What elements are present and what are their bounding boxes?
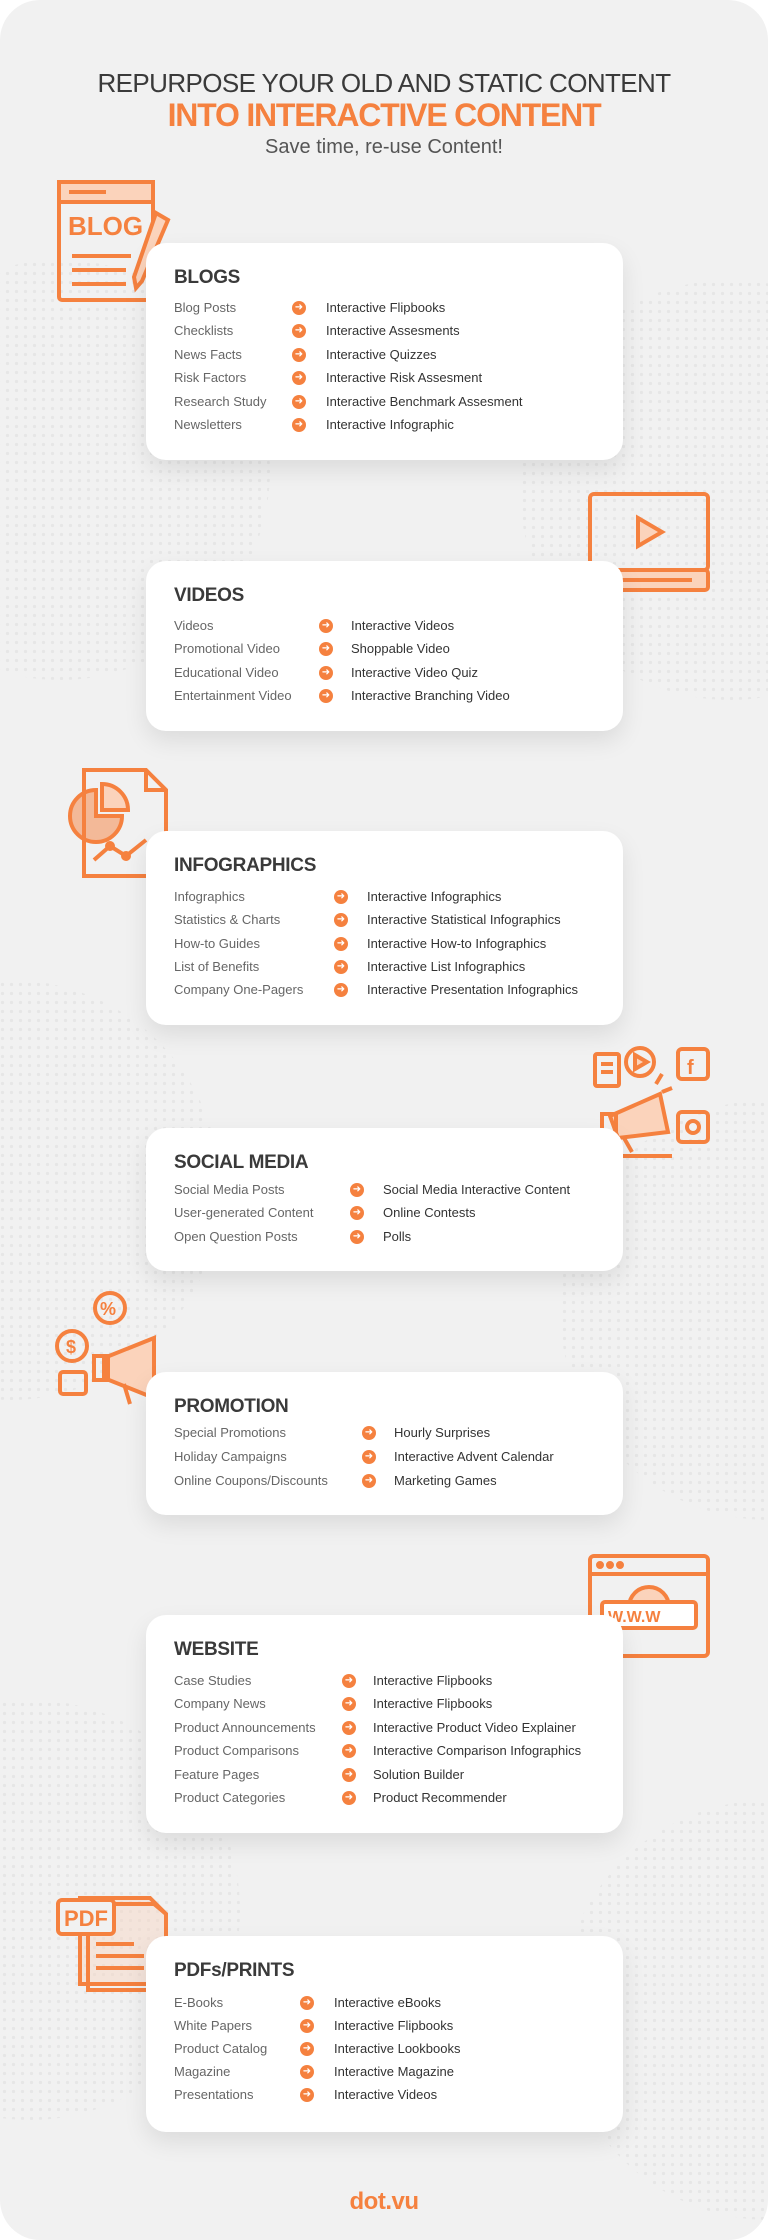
panel: blogs: ➜: [295, 302, 303, 313]
panel: blogs: Interactive Assesments: [326, 323, 460, 338]
panel: website: ➜: [345, 1675, 353, 1686]
panel: promotion: ➜: [365, 1427, 373, 1438]
logo: dot.vu: dot.vu: [350, 2188, 418, 2215]
panel: infographics: [146, 831, 623, 1025]
panel: blogs: Interactive Flipbooks: [326, 300, 445, 315]
panel: blogs: Newsletters: [174, 417, 242, 432]
panel: website: Product Comparisons: [174, 1743, 299, 1758]
icon: promotion: $: [66, 1337, 76, 1357]
panel: website: Interactive Flipbooks: [373, 1696, 492, 1711]
panel: blogs: Interactive Quizzes: [326, 347, 437, 362]
heading: website: WEBSITE: [174, 1639, 258, 1660]
panel: infographics: Infographics: [174, 889, 245, 904]
panel: website: Interactive Flipbooks: [373, 1673, 492, 1688]
panel: social media: Open Question Posts: [174, 1229, 298, 1244]
icon: website: W.W.W: [608, 1609, 661, 1626]
panel: website: Feature Pages: [174, 1767, 259, 1782]
icon: blog: BLOG: [68, 211, 143, 241]
heading: promotion: PROMOTION: [174, 1396, 288, 1417]
icon: promotion: %: [100, 1299, 116, 1319]
panel: blogs: ➜: [295, 325, 303, 336]
panel: videos: Videos: [174, 618, 214, 633]
panel: videos: ➜: [322, 667, 330, 678]
panel: blogs: Checklists: [174, 323, 233, 338]
panel: pdfs/prints: Magazine: [174, 2064, 230, 2079]
title line 2: INTO INTERACTIVE CONTENT: [168, 97, 600, 133]
icon: social media: [593, 1046, 710, 1158]
panel: pdfs/prints: White Papers: [174, 2018, 252, 2033]
panel: infographics: Company One-Pagers: [174, 982, 303, 997]
panel: pdfs/prints: [146, 1936, 623, 2132]
panel: videos: ➜: [322, 643, 330, 654]
icon: blog: [57, 180, 170, 302]
panel: infographics: ➜: [337, 891, 345, 902]
panel: social media: ➜: [353, 1184, 361, 1195]
heading: social media: SOCIAL MEDIA: [174, 1152, 308, 1173]
panel: videos: Interactive Video Quiz: [351, 665, 478, 680]
panel: pdfs/prints: Interactive eBooks: [334, 1995, 441, 2010]
panel: pdfs/prints: Presentations: [174, 2087, 254, 2102]
panel: social media: [146, 1128, 623, 1271]
panel: infographics: Interactive Infographics: [367, 889, 501, 904]
panel: infographics: Interactive Presentation Infographics: [367, 982, 578, 997]
heading: videos: VIDEOS: [174, 585, 244, 606]
panel: videos: ➜: [322, 690, 330, 701]
panel: website: ➜: [345, 1792, 353, 1803]
panel: infographics: ➜: [337, 914, 345, 925]
panel: videos: Educational Video: [174, 665, 279, 680]
icon: pdf: [56, 1896, 168, 1992]
panel: blogs: Interactive Infographic: [326, 417, 454, 432]
panel: website: Interactive Comparison Infographics: [373, 1743, 581, 1758]
panel: promotion: Interactive Advent Calendar: [394, 1449, 554, 1464]
panel: blogs: ➜: [295, 372, 303, 383]
panel: website: ➜: [345, 1769, 353, 1780]
panel: website: Case Studies: [174, 1673, 251, 1688]
panel: blogs: Blog Posts: [174, 300, 236, 315]
panel: infographics: ➜: [337, 938, 345, 949]
panel: promotion: [146, 1372, 623, 1515]
panel: blogs: Risk Factors: [174, 370, 246, 385]
panel: website: Product Recommender: [373, 1790, 507, 1805]
panel: pdfs/prints: Interactive Videos: [334, 2087, 437, 2102]
panel: social media: ➜: [353, 1231, 361, 1242]
panel: social media: ➜: [353, 1207, 361, 1218]
panel: videos: Interactive Branching Video: [351, 688, 510, 703]
title line 1: REPURPOSE YOUR OLD AND STATIC CONTENT: [98, 68, 670, 98]
panel: website: [146, 1615, 623, 1833]
panel: infographics: Interactive Statistical Infographics: [367, 912, 561, 927]
icon: pdf: PDF: [64, 1906, 108, 1931]
panel: infographics: List of Benefits: [174, 959, 259, 974]
panel: social media: Polls: [383, 1229, 411, 1244]
panel: videos: Promotional Video: [174, 641, 280, 656]
panel: blogs: ➜: [295, 349, 303, 360]
panel: website: Solution Builder: [373, 1767, 464, 1782]
panel: social media: Social Media Interactive Content: [383, 1182, 570, 1197]
panel: videos: Interactive Videos: [351, 618, 454, 633]
panel: promotion: Marketing Games: [394, 1473, 497, 1488]
panel: videos: Entertainment Video: [174, 688, 292, 703]
icon: website: [588, 1554, 710, 1658]
panel: website: Company News: [174, 1696, 266, 1711]
panel: pdfs/prints: Product Catalog: [174, 2041, 267, 2056]
panel: pdfs/prints: Interactive Flipbooks: [334, 2018, 453, 2033]
panel: infographics: Interactive List Infographics: [367, 959, 525, 974]
panel: pdfs/prints: E-Books: [174, 1995, 223, 2010]
panel: blogs: Interactive Benchmark Assesment: [326, 394, 523, 409]
icon: promotion: [55, 1291, 156, 1405]
panel: promotion: ➜: [365, 1475, 373, 1486]
panel: website: Product Announcements: [174, 1720, 316, 1735]
panel: website: Interactive Product Video Explainer: [373, 1720, 576, 1735]
panel: pdfs/prints: ➜: [303, 1997, 311, 2008]
panel: promotion: Holiday Campaigns: [174, 1449, 287, 1464]
panel: pdfs/prints: ➜: [303, 2066, 311, 2077]
panel: website: ➜: [345, 1698, 353, 1709]
panel: blogs: ➜: [295, 419, 303, 430]
panel: infographics: ➜: [337, 961, 345, 972]
panel: pdfs/prints: Interactive Lookbooks: [334, 2041, 460, 2056]
subtitle: Save time, re-use Content!: [265, 136, 503, 158]
panel: promotion: Hourly Surprises: [394, 1425, 490, 1440]
panel: infographics: Statistics & Charts: [174, 912, 280, 927]
panel: pdfs/prints: ➜: [303, 2043, 311, 2054]
panel: promotion: ➜: [365, 1451, 373, 1462]
panel: videos: [146, 561, 623, 731]
panel: videos: Shoppable Video: [351, 641, 450, 656]
panel: blogs: Interactive Risk Assesment: [326, 370, 482, 385]
panel: social media: Social Media Posts: [174, 1182, 285, 1197]
heading: blogs: BLOGS: [174, 267, 240, 288]
panel: pdfs/prints: Interactive Magazine: [334, 2064, 454, 2079]
panel: infographics: Interactive How-to Infographics: [367, 936, 546, 951]
panel: blogs: Research Study: [174, 394, 266, 409]
panel: social media: Online Contests: [383, 1205, 476, 1220]
panel: blogs: ➜: [295, 396, 303, 407]
panel: pdfs/prints: ➜: [303, 2089, 311, 2100]
panel: promotion: Special Promotions: [174, 1425, 286, 1440]
panel: website: Product Categories: [174, 1790, 285, 1805]
icon: infographic: [68, 768, 168, 878]
panel: blogs: News Facts: [174, 347, 242, 362]
icon: social media: f: [687, 1057, 694, 1079]
panel: website: ➜: [345, 1722, 353, 1733]
panel: blogs: [146, 243, 623, 460]
panel: videos: ➜: [322, 620, 330, 631]
panel: social media: User-generated Content: [174, 1205, 313, 1220]
panel: infographics: How-to Guides: [174, 936, 260, 951]
icon: video: [588, 492, 710, 592]
panel: infographics: ➜: [337, 984, 345, 995]
heading: pdfs/prints: PDFs/PRINTS: [174, 1960, 294, 1981]
panel: website: ➜: [345, 1745, 353, 1756]
panel: pdfs/prints: ➜: [303, 2020, 311, 2031]
panel: promotion: Online Coupons/Discounts: [174, 1473, 328, 1488]
heading: infographics: INFOGRAPHICS: [174, 855, 316, 876]
